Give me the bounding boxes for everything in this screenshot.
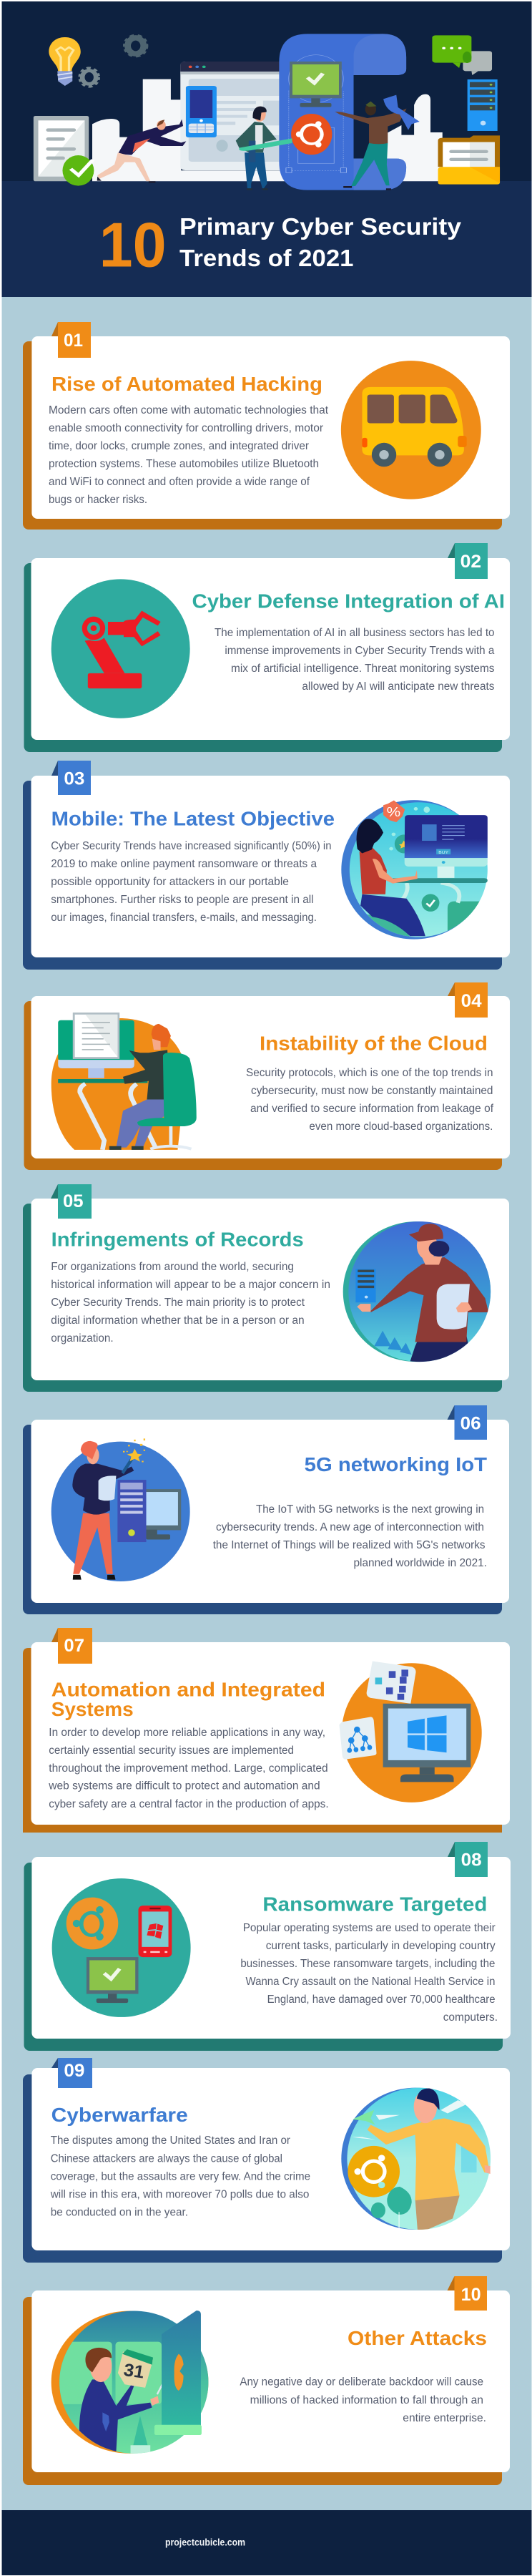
- figure: man with paper: [335, 95, 420, 190]
- heading: Automation and Integrated: [51, 1679, 325, 1700]
- footer: projectcubicle.com: [165, 2536, 245, 2547]
- panel: 07 Automation and Integrated Systems: [23, 1628, 510, 1833]
- heading: [51, 1679, 325, 1720]
- heading: Other Attacks: [348, 2327, 487, 2349]
- illustration: man with bird: [341, 2088, 491, 2230]
- text block: and verified to secure information from leakage of: [250, 1103, 494, 1115]
- panel: 08 Ransomware Targeted: [24, 1842, 511, 2051]
- text block: [51, 1261, 330, 1345]
- icon: chat bubbles: [432, 35, 492, 75]
- icon: light bulb: [49, 37, 81, 86]
- text block: web systems are difficult to protect and automation and: [48, 1780, 320, 1792]
- text block: cybersecurity, must now be constantly maintained: [251, 1085, 493, 1097]
- number badge: [58, 2058, 92, 2088]
- header illustration: [34, 34, 500, 190]
- icon: folder: [438, 135, 500, 185]
- text block: entire enterprise.: [403, 2412, 486, 2424]
- text block: The implementation of AI in all business sectors has led to: [215, 627, 495, 639]
- number badge: 05: [63, 1191, 84, 1211]
- text block: will rise in this era, with moreover 70 polls due to also: [50, 2189, 309, 2201]
- text block: throughout the improvement method. Large, complicated: [49, 1762, 328, 1775]
- text block: 2019 to make online payment ransomware or threats a: [51, 858, 317, 870]
- illustration: windows monitor: [339, 1662, 482, 1802]
- icon: ubuntu badge: [291, 114, 332, 155]
- text block: Popular operating systems are used to operate their: [243, 1922, 496, 1934]
- illustration: person at desk: [51, 1013, 197, 1150]
- heading: Rise of Automated Hacking: [51, 373, 322, 395]
- text block: mix of artificial intelligence. Threat monitoring systems: [231, 663, 495, 675]
- illustration: man with calendar: 31: [122, 2360, 145, 2382]
- title text: Primary Cyber Security: [179, 213, 462, 240]
- number badge: 10: [461, 2285, 481, 2305]
- browser window: [180, 62, 286, 170]
- footer: [1, 2510, 532, 2575]
- text block: be conducted on in the year.: [51, 2207, 188, 2219]
- illustration: person holding server: [343, 1221, 491, 1363]
- heading: Infringements of Records: [51, 1228, 304, 1251]
- number badge: 09: [64, 2061, 84, 2081]
- icon: phone: [186, 86, 217, 137]
- text block: In order to develop more reliable applications in any way,: [49, 1727, 325, 1739]
- text block: Any negative day or deliberate backdoor will cause: [240, 2376, 483, 2389]
- heading: Mobile: The Latest Objective: [51, 808, 335, 830]
- title number: 10: [99, 209, 167, 280]
- number badge: [58, 322, 91, 358]
- text block: The IoT with 5G networks is the next growing in: [256, 1503, 484, 1516]
- panel: 10 Other Attacks: [23, 2276, 510, 2485]
- text block: bugs or hacker risks.: [49, 494, 147, 506]
- text block: and WiFi to connect and often provide a wide range of: [49, 476, 310, 488]
- text block: our images, financial transfers, e-mails, and messaging.: [51, 912, 317, 924]
- icon: robot arm: [51, 579, 190, 718]
- text block: [213, 1503, 487, 1569]
- number badge: [455, 543, 488, 579]
- text block: smartphones. Further risks to people are present in all: [51, 894, 314, 906]
- illustration: woman at computer: [341, 800, 488, 940]
- text block: [215, 627, 495, 693]
- number badge: 08: [461, 1850, 482, 1870]
- text block: coverage, but the assaults are very few. And the crime: [51, 2171, 310, 2183]
- text block: historical information will appear to be a major concern in: [51, 1279, 330, 1291]
- number badge: 02: [460, 552, 481, 572]
- text block: [240, 2376, 486, 2424]
- text block: the Internet of Things will be realized with 5G's networks: [213, 1539, 486, 1551]
- city skyline: [92, 79, 443, 181]
- panel: 01 Rise of Automated Hacking: [23, 322, 510, 530]
- title text: Trends of 2021: [179, 245, 353, 271]
- icon: gear small: [81, 69, 98, 86]
- text block: cyber safety are a central factor in the production of apps.: [49, 1798, 329, 1810]
- text block: certainly essential security issues are implemented: [49, 1745, 294, 1757]
- number badge: 01: [64, 331, 83, 351]
- text block: current tasks, particularly in developing country: [266, 1940, 496, 1952]
- number badge: [58, 1184, 92, 1219]
- text block: [240, 1922, 498, 2024]
- icon: red phone: [139, 1906, 172, 1957]
- text block: computers.: [443, 2011, 498, 2024]
- illustration: person with wand and computer: [51, 1438, 190, 1581]
- text block: [51, 840, 331, 924]
- text block: planned worldwide in 2021.: [353, 1557, 487, 1569]
- illustration: operating system devices: [52, 1878, 191, 2017]
- icon: document with check: [34, 116, 94, 186]
- text block: [50, 2135, 310, 2219]
- text block: The disputes among the United States and Iran or: [51, 2135, 290, 2147]
- text block: Cyber Security Trends. The main priority is to protect: [51, 1297, 305, 1309]
- panel: 09 Cyberwarfare: [23, 2058, 510, 2263]
- heading: Ransomware Targeted: [262, 1893, 487, 1916]
- icon: gear large: [125, 36, 146, 56]
- number badge: 03: [64, 769, 84, 789]
- text block: cybersecurity trends. A new age of interconnection with: [216, 1521, 484, 1533]
- text block: [48, 1727, 329, 1810]
- text block: Chinese attackers are always the cause of global: [51, 2152, 282, 2165]
- heading: Instability of the Cloud: [260, 1033, 488, 1055]
- text block: Wanna Cry assault on the National Health Service in: [246, 1976, 495, 1988]
- text block: [246, 1067, 494, 1133]
- text block: organization.: [51, 1332, 114, 1345]
- icon: monitor: [290, 62, 342, 107]
- text block: possible opportunity for attackers in our portable: [51, 876, 289, 888]
- heading: Cyberwarfare: [51, 2104, 188, 2126]
- header banner: [1, 1, 532, 297]
- figure: person pushing: [97, 119, 186, 183]
- illustration: woman at computer: BUY: [438, 850, 448, 855]
- number badge: [58, 1628, 92, 1664]
- number badge: [455, 982, 488, 1018]
- number badge: 06: [460, 1414, 481, 1434]
- number badge: 07: [64, 1636, 84, 1656]
- text block: Security protocols, which is one of the top trends in: [246, 1067, 493, 1079]
- icon: check monitor: [87, 1957, 139, 2003]
- number badge: 04: [461, 991, 482, 1011]
- text block: Modern cars often come with automatic technologies that: [49, 404, 329, 416]
- text block: allowed by AI will anticipate new threats: [302, 680, 495, 693]
- figure: woman with stick: [236, 107, 292, 190]
- icon: bus: [341, 361, 481, 499]
- text block: even more cloud-based organizations.: [309, 1121, 493, 1133]
- number badge: [58, 761, 91, 795]
- panel: 06 5G networking IoT: [23, 1405, 509, 1614]
- heading: 5G networking IoT: [305, 1453, 487, 1475]
- text block: businesses. These ransomware targets, including the: [240, 1958, 495, 1970]
- icon: ubuntu disc: [66, 1898, 118, 1949]
- heading: Cyber Defense Integration of AI: [192, 590, 505, 612]
- text block: digital information whether that be in a person or an: [51, 1314, 305, 1327]
- number badge: [455, 1842, 488, 1877]
- illustration: man with calendar: [51, 2311, 208, 2454]
- text block: immense improvements in Cyber Security Trends with a: [225, 645, 495, 657]
- text block: Cyber Security Trends have increased significantly (50%) in: [51, 840, 331, 852]
- text block: For organizations from around the world, securing: [51, 1261, 294, 1273]
- panel: 02 Cyber Defense Integration of AI: [24, 543, 510, 752]
- text block: enable smooth connectivity for controlling drivers, motor: [49, 422, 323, 434]
- panel: 05 Infringements of Records: [23, 1184, 509, 1392]
- blue scroll: [279, 34, 406, 190]
- icon: server: [468, 79, 498, 131]
- title text: [179, 213, 462, 271]
- illustration: woman at computer: %: [387, 806, 400, 820]
- text block: time, door locks, crumple zones, and integrated driver: [49, 440, 309, 452]
- panel: 03 Mobile: The Latest Objective: [23, 761, 510, 970]
- panel: 04 Instability of the Cloud: [24, 982, 510, 1170]
- text block: millions of hacked information to fall through an: [250, 2394, 483, 2406]
- heading: Systems: [51, 1698, 134, 1720]
- text block: England, have damaged over 70,000 healthcare: [267, 1994, 496, 2006]
- number badge: [455, 1405, 487, 1440]
- text block: [49, 404, 329, 506]
- text block: protection systems. These automobiles utilize Bluetooth: [49, 458, 319, 470]
- number badge: [455, 2276, 487, 2311]
